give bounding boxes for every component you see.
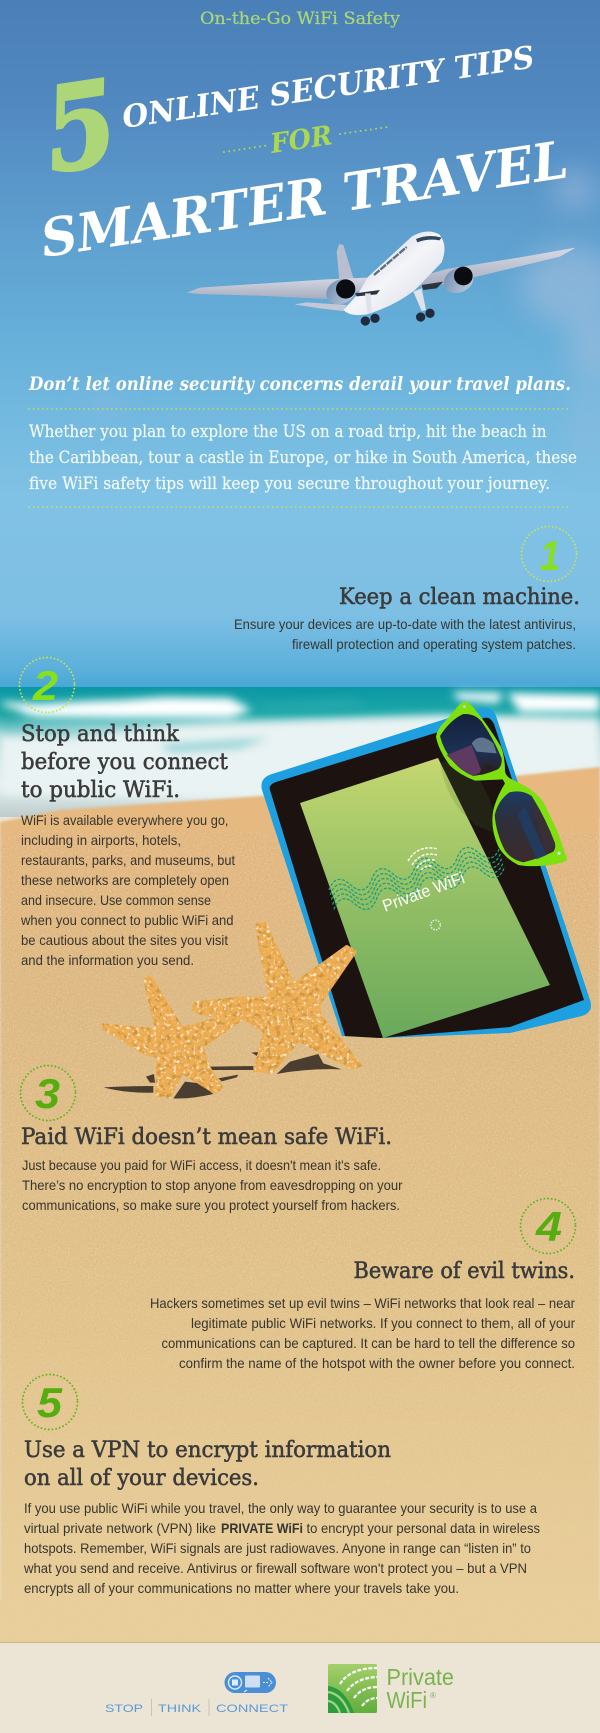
main title xyxy=(36,40,572,270)
starfish shadows xyxy=(103,1052,342,1098)
logo wordmark: WiFi xyxy=(386,1687,427,1713)
body text xyxy=(22,1157,403,1213)
badge: number 4 xyxy=(520,1198,576,1254)
heading: Use a VPN to encrypt information on all of your devices: on all of your devices. xyxy=(24,1466,259,1491)
intro paragraph: Whether you plan to explore the US on a road trip, hit the beach in xyxy=(29,422,547,441)
tip 5 xyxy=(22,1374,540,1596)
badge: number 5 xyxy=(22,1374,78,1430)
badge: number 4: 4 xyxy=(535,1203,562,1250)
screen wave pattern xyxy=(327,840,507,917)
heading: Use a VPN to encrypt information on all of your devices xyxy=(24,1438,391,1491)
logo: Stop Think Connect xyxy=(105,1672,288,1716)
body text xyxy=(234,616,576,652)
body text: There’s no encryption to stop anyone from eavesdropping on your xyxy=(22,1177,403,1193)
badge: number 3 xyxy=(20,1066,76,1120)
starfish right xyxy=(193,923,360,1072)
body text: Just because you paid for WiFi access, it doesn't mean it's safe. xyxy=(22,1157,381,1173)
heading: Stop and think before you connect to public WiFi: Stop and think xyxy=(21,722,180,747)
body text: including in airports, hotels, xyxy=(21,832,181,848)
body text xyxy=(150,1295,575,1371)
heading: Beware of evil twins: Beware of evil twins. xyxy=(354,1259,575,1284)
logo: Private WiFi xyxy=(328,1664,454,1713)
badge: number 5: 5 xyxy=(37,1379,63,1426)
intro block xyxy=(28,374,577,507)
body text: PRIVATE WiFi xyxy=(221,1520,303,1536)
body text: be cautious about the sites you visit xyxy=(21,932,228,948)
body text: Ensure your devices are up-to-date with the latest antivirus, xyxy=(234,616,576,632)
body text: and insecure. Use common sense xyxy=(21,892,211,908)
body text: encrypts all of your communications no matter where your travels take you. xyxy=(24,1580,459,1596)
screen loading spinner xyxy=(431,920,440,930)
body text: communications, so make sure you protect yourself from hackers. xyxy=(22,1197,400,1213)
body text: If you use public WiFi while you travel, the only way to guarantee your security is to use a xyxy=(24,1500,537,1516)
body text: WiFi is available everywhere you go, xyxy=(21,812,228,828)
heading: Use a VPN to encrypt information on all of your devices: Use a VPN to encrypt information xyxy=(24,1438,391,1463)
sunglasses shadow on screen xyxy=(440,760,500,835)
heading: Stop and think before you connect to public WiFi: before you connect xyxy=(21,750,228,775)
logo pill icon xyxy=(224,1672,276,1693)
body text: what you send and receive. Antivirus or firewall software won't protect you – but a VPN xyxy=(23,1560,527,1576)
logo wordmark: THINK xyxy=(158,1703,202,1715)
background: sky xyxy=(0,0,600,690)
subtitle: On-the-Go WiFi Safety: On-the-Go WiFi Safety xyxy=(200,9,401,28)
starfish left xyxy=(103,977,240,1097)
body text: legitimate public WiFi networks. If you connect to them, all of your xyxy=(191,1315,575,1331)
tip 3 xyxy=(20,1066,403,1213)
sunglasses xyxy=(436,701,567,866)
badge: number 1: 1 xyxy=(540,532,560,579)
body text: hotspots. Remember, WiFi signals are just radiowaves. Anyone in range can “listen in” to xyxy=(24,1540,531,1556)
heading: Keep a clean machine: Keep a clean machine. xyxy=(339,585,580,610)
tip 2 xyxy=(20,658,235,968)
body text: and the information you send. xyxy=(21,952,194,968)
body text: when you connect to public WiFi and xyxy=(20,912,233,928)
tablet with Private WiFi screen xyxy=(261,707,591,1038)
body text: Hackers sometimes set up evil twins – WiFi networks that look real – near xyxy=(150,1295,575,1311)
logo wordmark xyxy=(105,1699,288,1716)
tip 4 xyxy=(150,1198,576,1371)
logo wordmark: ® xyxy=(430,1691,436,1700)
body text: virtual private network (VPN) like xyxy=(24,1520,216,1536)
body text: to encrypt your personal data in wireless xyxy=(306,1520,540,1536)
airplane illustration xyxy=(187,231,576,326)
logo wordmark: Private xyxy=(386,1664,454,1690)
body text: firewall protection and operating system patches. xyxy=(292,636,576,652)
badge: number 2: 2 xyxy=(32,662,58,709)
logo wordmark xyxy=(386,1664,454,1713)
logo wordmark: CONNECT xyxy=(216,1703,288,1715)
body text: restaurants, parks, and museums, but xyxy=(21,852,235,868)
body text xyxy=(23,1500,540,1596)
heading: Stop and think before you connect to public WiFi: to public WiFi. xyxy=(21,778,180,803)
badge: number 2 xyxy=(20,658,74,712)
logo wordmark: STOP xyxy=(105,1703,143,1715)
logo icon xyxy=(328,1664,377,1713)
heading: Paid WiFi doesn't mean safe WiFi: Paid WiFi doesn’t mean safe WiFi. xyxy=(21,1125,392,1150)
badge: number 3: 3 xyxy=(35,1070,60,1117)
body text: these networks are completely open xyxy=(21,872,229,888)
body text: communications can be captured. It can be hard to tell the difference so xyxy=(162,1335,575,1351)
title word: For with dotted rules: FOR xyxy=(268,120,334,160)
intro paragraph: five WiFi safety tips will keep you secure throughout your journey. xyxy=(29,474,550,493)
title word: For with dotted rules xyxy=(224,120,388,160)
intro paragraph xyxy=(29,422,577,493)
screen label: Private WiFi: Private WiFi xyxy=(380,868,467,916)
background: clouds xyxy=(85,170,600,465)
background: sand xyxy=(0,767,600,1642)
heading: Stop and think before you connect to public WiFi xyxy=(21,722,228,803)
background: sea and waves xyxy=(0,687,600,817)
body text: confirm the name of the hotspot with the owner before you connect. xyxy=(179,1355,575,1371)
badge: number 1 xyxy=(522,526,576,582)
body text xyxy=(20,812,235,968)
title line: Smarter Travel: SMARTER TRAVEL xyxy=(37,130,572,270)
tip 1 xyxy=(234,526,580,652)
screen wifi arcs xyxy=(408,848,438,870)
footer band xyxy=(0,1642,600,1733)
starfish pair with shadows xyxy=(103,923,360,1098)
title numeral 5: 5 xyxy=(36,55,125,200)
title line: Online Security Tips: ONLINE SECURITY TIPS xyxy=(120,40,537,136)
